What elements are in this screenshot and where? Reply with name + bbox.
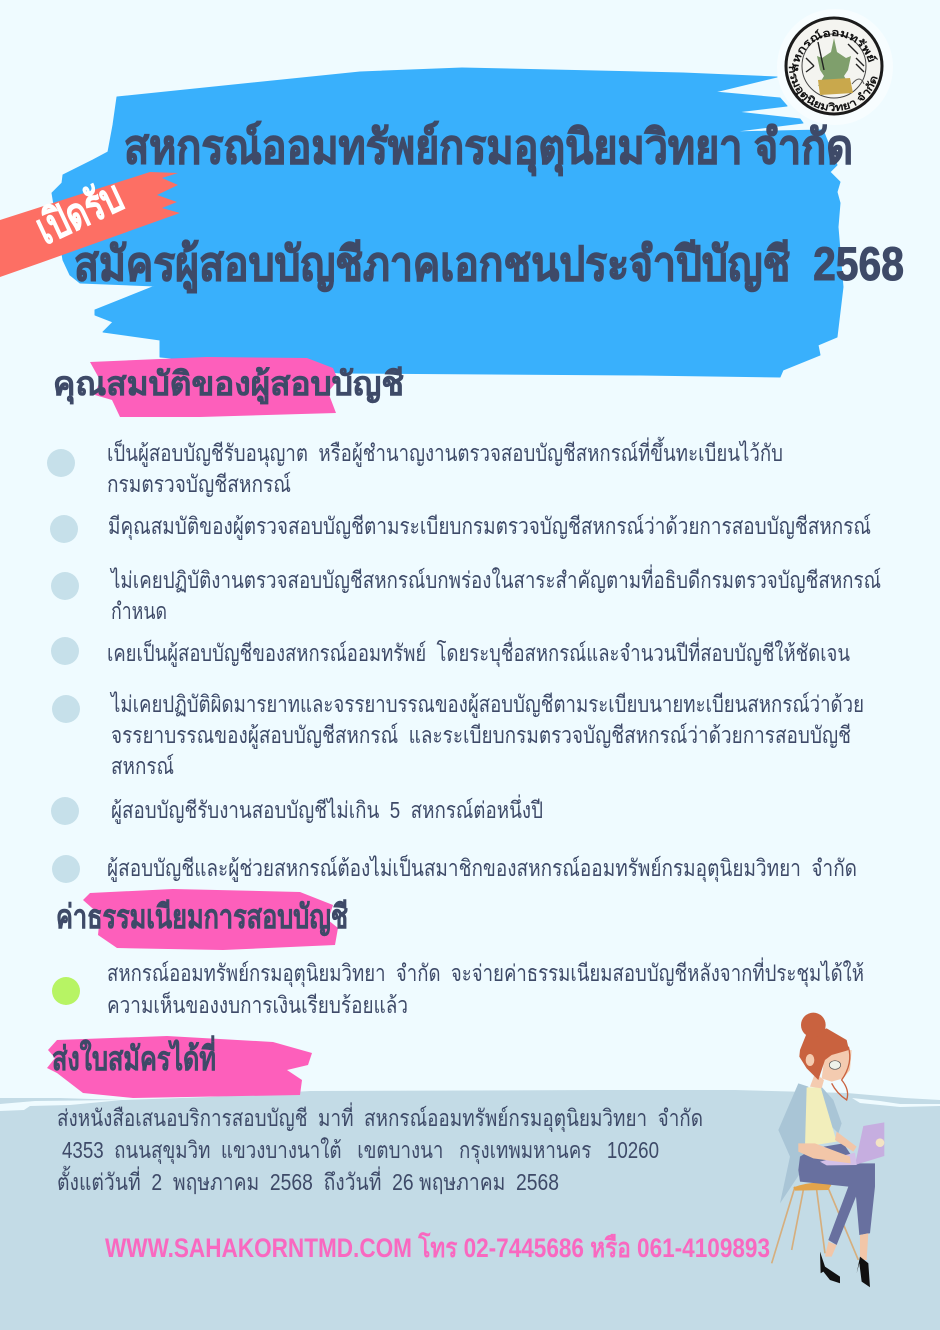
badge: open for applications [0, 172, 180, 277]
item 3 [51, 564, 881, 624]
heading: audit fee [56, 889, 348, 950]
item 1: กรมตรวจบัญชีสหกรณ์ [107, 471, 291, 497]
address text [57, 1102, 703, 1195]
address text: ส่งหนังสือเสนอบริการสอบบัญชี มาที่ สหกรณ์ออมทรัพย์กรมอุตุนิยมวิทยา จำกัด [57, 1102, 703, 1132]
illustration: woman with laptop [772, 1013, 884, 1287]
audit fee text [52, 957, 864, 1018]
item 3: กำหนด [111, 598, 167, 624]
audit fee text: ความเห็นของงบการเงินเรียบร้อยแล้ว [107, 990, 408, 1018]
item 6 [51, 794, 543, 825]
heading: where to apply [47, 1035, 312, 1098]
footer band [0, 1090, 940, 1330]
item 6: ผู้สอบบัญชีรับงานสอบบัญชีไม่เกิน 5 สหกรณ์ต่อหนึ่งปี [111, 794, 543, 824]
qualification list [47, 437, 881, 883]
badge: open for applications: เปิดรับ [29, 172, 131, 254]
item 1 [47, 437, 783, 497]
heading: where to apply: ส่งใบสมัครได้ที่ [52, 1035, 216, 1077]
logo: สหกรณ์ออมทรัพย์ [792, 28, 878, 71]
title line 1: สหกรณ์ออมทรัพย์กรมอุตุนิยมวิทยา จำกัด [124, 120, 853, 176]
item 1: เป็นผู้สอบบัญชีรับอนุญาต หรือผู้ชำนาญงานตรวจสอบบัญชีสหกรณ์ที่ขึ้นทะเบียนไว้กับ [107, 437, 783, 467]
contact line: WWW.SAHAKORNTMD.COM โทร 02-7445686 หรือ 061-4109893 [105, 1231, 770, 1263]
address text: 4353 ถนนสุขุมวิท แขวงบางนาใต้ เขตบางนา กรุงเทพมหานคร 10260 [62, 1137, 659, 1164]
address text: ตั้งแต่วันที่ 2 พฤษภาคม 2568 ถึงวันที่ 26 พฤษภาคม 2568 [57, 1166, 559, 1195]
logo [784, 16, 884, 116]
item 5 [52, 691, 864, 779]
item 5: สหกรณ์ [111, 753, 174, 779]
heading: audit fee: ค่าธรรมเนียมการสอบบัญชี [56, 898, 348, 936]
blue brush banner [52, 68, 843, 377]
logo: กรมอุตุนิยมวิทยา จำกัด [788, 66, 878, 112]
heading: qualifications [53, 357, 404, 417]
heading: qualifications: คุณสมบัติของผู้สอบบัญชี [53, 365, 404, 405]
